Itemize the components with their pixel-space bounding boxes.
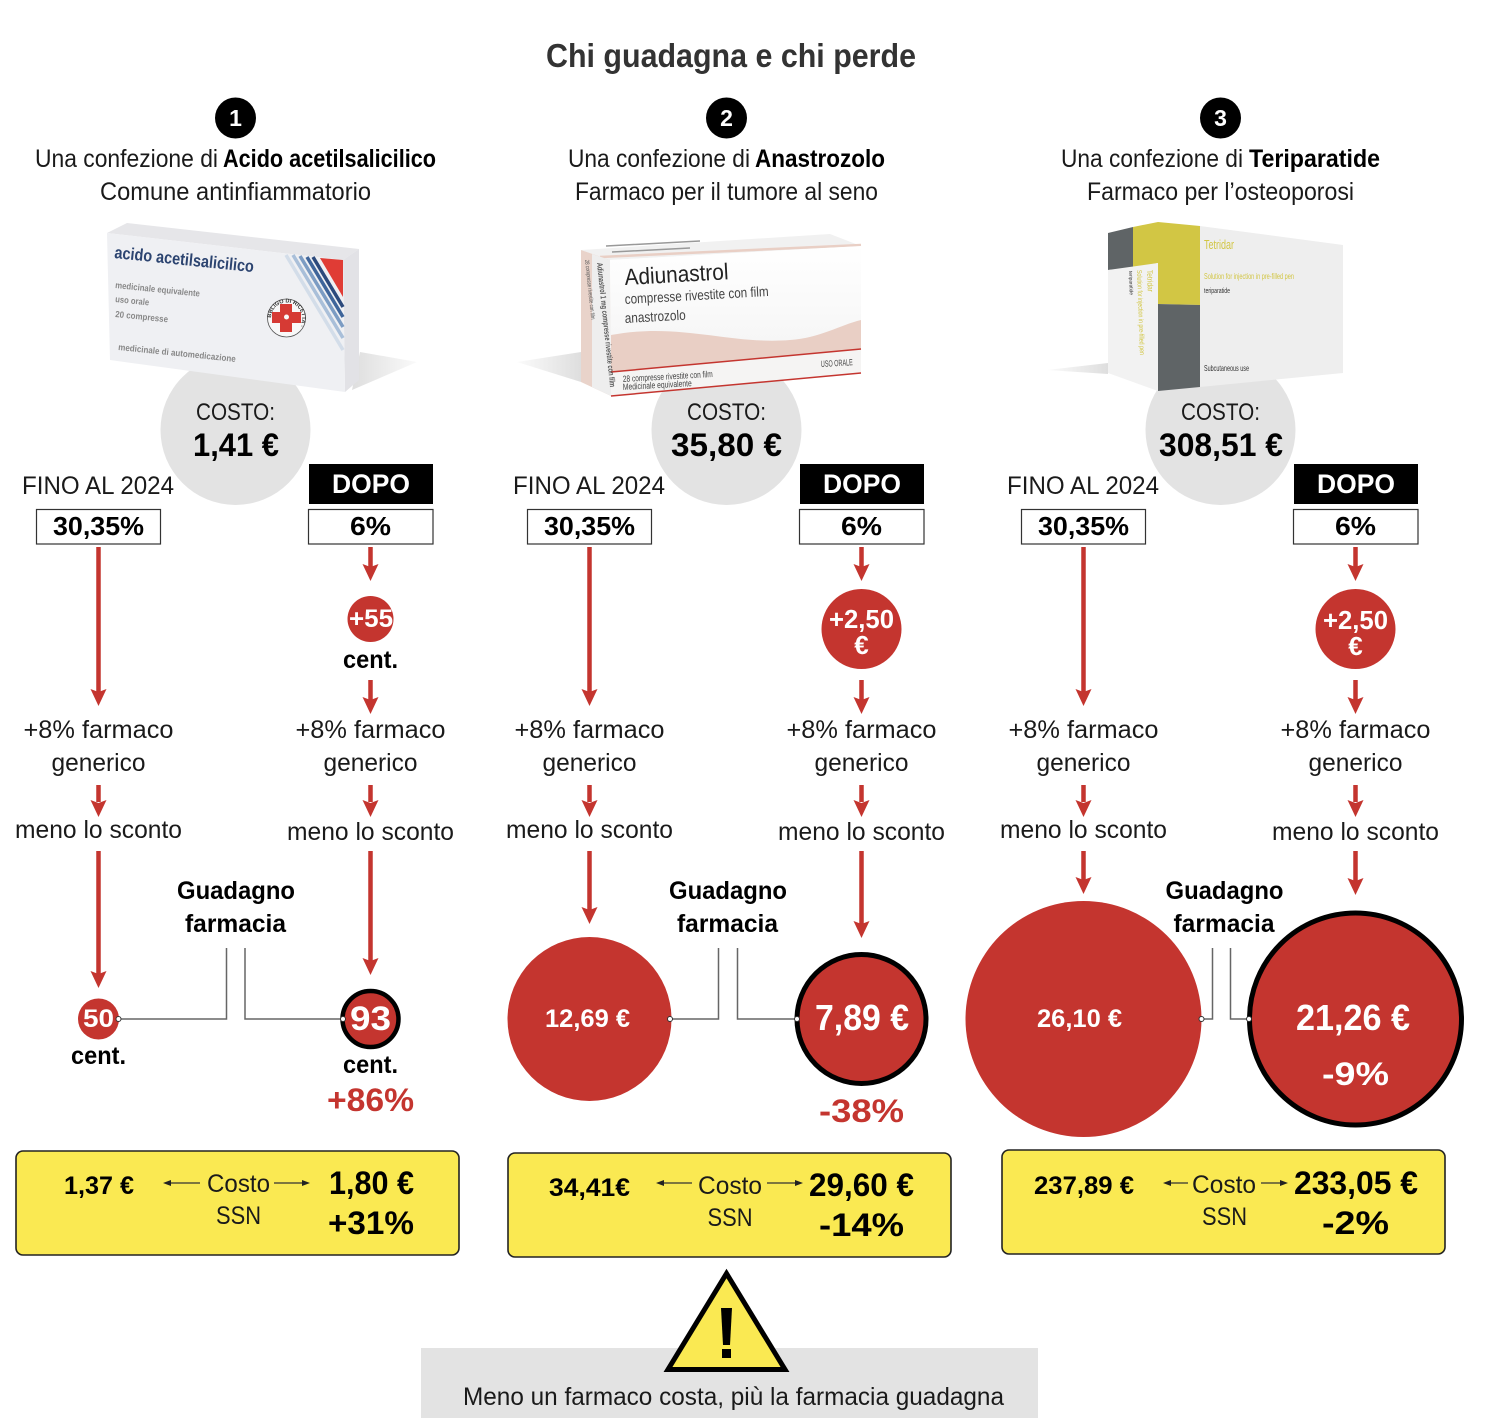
steps right 1 bbox=[287, 716, 454, 846]
surcharge +55 cent.: cent. bbox=[343, 646, 398, 674]
rate box 6%: 6% bbox=[1335, 511, 1376, 541]
steps right 2: +8% farmaco bbox=[786, 716, 936, 744]
drug box: Tetridar: teriparatide bbox=[1204, 288, 1230, 295]
steps left 2: +8% farmaco bbox=[514, 716, 664, 744]
gain before: 12,69 €: 12,69 € bbox=[545, 1005, 630, 1033]
after label 1: DOPO bbox=[332, 469, 410, 499]
rate box 6%: 6% bbox=[350, 511, 391, 541]
drug heading 1: Comune antinfiammatorio bbox=[100, 178, 371, 206]
steps right 3 bbox=[1272, 716, 1439, 846]
steps left 3 bbox=[1000, 716, 1167, 844]
after label 2 bbox=[800, 464, 924, 504]
number badge 1: 1 bbox=[229, 105, 242, 131]
drug box: acido acetilsalicilico bbox=[107, 223, 410, 392]
drug box: Adiunastrol: Adiunastrol 1 mg compresse rivestite con film bbox=[595, 262, 617, 388]
drug heading 2: Farmaco per il tumore al seno bbox=[575, 178, 878, 206]
cost label 2 bbox=[671, 399, 782, 463]
rate box 6%: 6% bbox=[841, 511, 882, 541]
surcharge +2,50 € bbox=[1316, 589, 1396, 669]
gain after: 21,26 € -9%: -9% bbox=[1322, 1056, 1389, 1092]
drug heading 3: Teriparatide bbox=[1249, 145, 1380, 173]
gain after: 7,89 € -38% bbox=[794, 954, 926, 1129]
surcharge +2,50 € bbox=[822, 589, 902, 669]
gain after: 7,89 € -38%: -38% bbox=[819, 1093, 904, 1129]
SSN cost box 1 bbox=[16, 1151, 459, 1255]
drug heading 3: Una confezione di bbox=[1061, 145, 1243, 173]
drug heading 1: Una confezione di bbox=[35, 145, 218, 173]
gain before: 50 cent.: cent. bbox=[71, 1042, 126, 1070]
steps left 2: meno lo sconto bbox=[506, 816, 673, 844]
SSN cost box 1: Costo bbox=[207, 1170, 270, 1198]
rate box 30,35% bbox=[528, 510, 652, 544]
callout bbox=[421, 1348, 1038, 1418]
surcharge +55 cent.: +55 bbox=[349, 605, 393, 633]
drug box: Tetridar: Subcutaneous use bbox=[1204, 364, 1249, 373]
arrows right 1 bbox=[362, 547, 378, 975]
steps left 1 bbox=[15, 716, 182, 844]
drug box: acido acetilsalicilico: 20 compresse bbox=[115, 309, 169, 324]
drug box: acido acetilsalicilico: FARMACO · SENZA OBBLIGO DI RICETTA · bbox=[267, 298, 306, 327]
before label 1: FINO AL 2024 bbox=[22, 472, 174, 500]
number badge 2 bbox=[706, 98, 747, 138]
steps right 2 bbox=[778, 716, 945, 846]
drug box: Adiunastrol bbox=[517, 234, 861, 396]
pharmacy gain label 3 bbox=[1166, 877, 1284, 938]
drug box: Tetridar: Solution for injection in pre-filled pen bbox=[1204, 272, 1294, 281]
before label 3: FINO AL 2024 bbox=[1007, 472, 1159, 500]
steps right 3: generico bbox=[1308, 749, 1402, 777]
gain before: 26,10 €: 26,10 € bbox=[1037, 1005, 1122, 1033]
steps right 2: meno lo sconto bbox=[778, 818, 945, 846]
SSN cost box 2: 34,41€ bbox=[549, 1174, 630, 1202]
SSN cost box 1: SSN bbox=[216, 1202, 261, 1230]
steps left 1: meno lo sconto bbox=[15, 816, 182, 844]
pharmacy gain label 1 bbox=[177, 877, 295, 938]
SSN cost box 3: 237,89 € bbox=[1034, 1172, 1134, 1200]
SSN cost box 1: 1,80 € bbox=[329, 1165, 414, 1201]
steps right 3: +8% farmaco bbox=[1280, 716, 1430, 744]
steps left 1: +8% farmaco bbox=[24, 716, 174, 744]
gain after: 7,89 € -38%: 7,89 € bbox=[815, 997, 909, 1038]
drug box: acido acetilsalicilico: medicinale equivalente bbox=[115, 280, 200, 299]
rate box 30,35% bbox=[36, 510, 160, 544]
SSN cost box 3: Costo bbox=[1192, 1171, 1256, 1199]
after label 2: DOPO bbox=[823, 469, 901, 499]
icon: warning triangle bbox=[668, 1274, 785, 1370]
pharmacy gain label 2: farmacia bbox=[677, 910, 779, 938]
SSN cost box 1: +31% bbox=[328, 1205, 414, 1241]
steps right 1: generico bbox=[324, 749, 418, 777]
gain after: 93 cent. +86%: 93 bbox=[350, 1000, 391, 1038]
panel: column 1 Acido acetilsalicilico bbox=[15, 98, 460, 1256]
cost label 2: COSTO: bbox=[687, 399, 766, 426]
SSN cost box 3 bbox=[1002, 1150, 1445, 1254]
drug box: Tetridar bbox=[1047, 222, 1343, 391]
steps right 3: meno lo sconto bbox=[1272, 818, 1439, 846]
cost label 1: COSTO: bbox=[196, 399, 275, 426]
SSN cost box 2 bbox=[508, 1153, 951, 1257]
cost label 2: 35,80 € bbox=[671, 427, 782, 463]
drug box: Tetridar: Tetridar bbox=[1204, 237, 1234, 252]
after label 3 bbox=[1294, 464, 1418, 504]
surcharge +2,50 €: € bbox=[854, 630, 869, 660]
SSN cost box 2: SSN bbox=[708, 1204, 752, 1232]
steps right 1: meno lo sconto bbox=[287, 818, 454, 846]
number badge 1 bbox=[215, 98, 256, 138]
arrows left 3 bbox=[1076, 547, 1092, 894]
drug heading 2: Anastrozolo bbox=[755, 145, 885, 173]
number badge 3 bbox=[1200, 98, 1241, 138]
drug box: acido acetilsalicilico: acido acetilsalicilico bbox=[114, 243, 255, 276]
gain after: 93 cent. +86% bbox=[327, 991, 414, 1118]
connectors 3 bbox=[1199, 948, 1252, 1022]
number badge 2: 2 bbox=[720, 105, 733, 131]
number badge 3: 3 bbox=[1214, 105, 1227, 131]
callout: Meno un farmaco costa, più la farmacia guadagna bbox=[463, 1383, 1004, 1411]
steps left 1: generico bbox=[52, 749, 146, 777]
arrows left 2 bbox=[582, 547, 598, 924]
drug box: Tetridar: Solution for injection in pre-filled pen bbox=[1135, 270, 1145, 355]
cost label 3 bbox=[1159, 399, 1283, 463]
rate box 6% bbox=[800, 510, 924, 544]
drug heading 1 bbox=[35, 145, 436, 206]
cost label 3: 308,51 € bbox=[1159, 427, 1283, 463]
pharmacy gain label 3: Guadagno bbox=[1166, 877, 1284, 905]
rate box 30,35% bbox=[1022, 510, 1146, 544]
drug box: Adiunastrol: USO ORALE bbox=[821, 357, 853, 369]
SSN cost box 3: -2% bbox=[1322, 1205, 1389, 1241]
SSN cost box 2: 29,60 € bbox=[809, 1167, 914, 1203]
pharmacy gain label 2 bbox=[669, 877, 787, 938]
after label 1 bbox=[309, 464, 433, 504]
drug heading 2 bbox=[568, 145, 885, 206]
drug box: acido acetilsalicilico: uso orale bbox=[115, 294, 150, 307]
SSN cost box 2: Costo bbox=[698, 1172, 762, 1200]
before label 2: FINO AL 2024 bbox=[513, 472, 665, 500]
pharmacy gain label 1: farmacia bbox=[185, 910, 287, 938]
cost circle 3 bbox=[1146, 355, 1296, 505]
drug box: acido acetilsalicilico: medicinale di automedicazione bbox=[118, 342, 236, 364]
surcharge +55 cent. bbox=[343, 596, 398, 674]
surcharge +2,50 €: +2,50 bbox=[1323, 605, 1388, 635]
gain before: 12,69 € bbox=[508, 937, 672, 1101]
rate box 30,35%: 30,35% bbox=[53, 511, 144, 541]
drug heading 3 bbox=[1061, 145, 1380, 206]
gain before: 50 cent. bbox=[71, 998, 126, 1070]
steps right 2: generico bbox=[814, 749, 908, 777]
drug box: Adiunastrol: anastrozolo bbox=[624, 307, 686, 326]
surcharge +2,50 €: € bbox=[1348, 631, 1363, 661]
cost label 1 bbox=[193, 399, 279, 463]
drug box: Tetridar: Tetridar bbox=[1145, 270, 1155, 292]
SSN cost box 2: -14% bbox=[819, 1207, 904, 1243]
gain after: 93 cent. +86%: cent. bbox=[343, 1051, 398, 1079]
steps right 1: +8% farmaco bbox=[296, 716, 446, 744]
connectors 1 bbox=[118, 948, 343, 1019]
pharmacy gain label 3: farmacia bbox=[1174, 910, 1276, 938]
drug heading 1: Acido acetilsalicilico bbox=[223, 145, 436, 173]
title: Chi guadagna e chi perde bbox=[546, 37, 916, 74]
rate box 6% bbox=[1294, 510, 1418, 544]
panel: column 3 Teriparatide bbox=[966, 98, 1462, 1254]
cost circle 1 bbox=[160, 355, 310, 505]
rate box 30,35%: 30,35% bbox=[544, 511, 635, 541]
drug box: Adiunastrol: compresse rivestite con film bbox=[624, 283, 769, 307]
gain before: 50 cent.: 50 bbox=[83, 1005, 114, 1033]
SSN cost box 3: 233,05 € bbox=[1294, 1165, 1418, 1201]
cost label 3: COSTO: bbox=[1181, 399, 1260, 426]
rate box 6% bbox=[308, 510, 433, 544]
arrows right 3 bbox=[1348, 547, 1364, 895]
steps left 3: generico bbox=[1036, 749, 1130, 777]
pharmacy gain label 1: Guadagno bbox=[177, 877, 295, 905]
pharmacy gain label 2: Guadagno bbox=[669, 877, 787, 905]
steps left 2 bbox=[506, 716, 673, 844]
SSN cost box 1: 1,37 € bbox=[64, 1172, 134, 1200]
steps left 3: +8% farmaco bbox=[1008, 716, 1158, 744]
gain before: 26,10 € bbox=[966, 901, 1202, 1137]
arrows right 2 bbox=[854, 547, 870, 938]
steps left 2: generico bbox=[542, 749, 636, 777]
gain after: 21,26 € -9%: 21,26 € bbox=[1296, 997, 1410, 1038]
drug box: Adiunastrol: 28 compresse rivestite con film bbox=[623, 369, 713, 384]
steps left 3: meno lo sconto bbox=[1000, 816, 1167, 844]
after label 3: DOPO bbox=[1317, 469, 1395, 499]
drug heading 2: Una confezione di bbox=[568, 145, 750, 173]
drug box: Adiunastrol: Adiunastrol bbox=[624, 258, 729, 290]
gain after: 21,26 € -9% bbox=[1250, 913, 1462, 1125]
rate box 30,35%: 30,35% bbox=[1038, 511, 1129, 541]
drug heading 3: Farmaco per l’osteoporosi bbox=[1087, 178, 1354, 206]
SSN cost box 3: SSN bbox=[1202, 1203, 1247, 1231]
surcharge +2,50 €: +2,50 bbox=[829, 604, 894, 634]
connectors 2 bbox=[670, 948, 797, 1019]
gain after: 93 cent. +86%: +86% bbox=[327, 1082, 414, 1118]
panel: column 2 Anastrozolo bbox=[506, 98, 951, 1257]
cost label 1: 1,41 € bbox=[193, 427, 279, 463]
drug box: Adiunastrol: 28 compresse rivestite con film bbox=[583, 260, 595, 320]
drug box: Tetridar: teriparatide bbox=[1127, 271, 1134, 295]
arrows left 1 bbox=[90, 547, 106, 988]
cost circle 2 bbox=[652, 355, 802, 505]
drug box: Adiunastrol: Medicinale equivalente bbox=[623, 378, 692, 392]
